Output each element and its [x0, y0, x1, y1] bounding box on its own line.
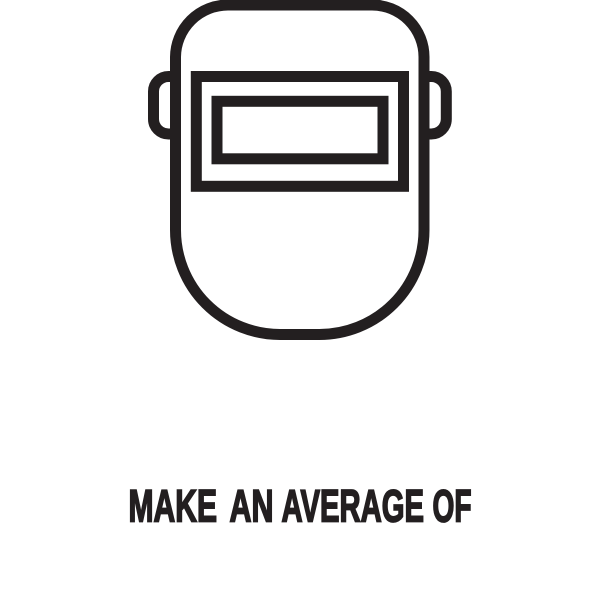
heading text: AN — [230, 480, 274, 531]
icon: welding helmet — [154, 5, 446, 334]
visor outer frame — [196, 76, 404, 186]
heading text: AVERAGE — [282, 480, 424, 531]
heading text: OF — [432, 480, 472, 531]
helmet shell — [176, 5, 424, 334]
right ear strap — [428, 76, 446, 134]
heading text: MAKE — [128, 480, 217, 531]
left ear strap — [154, 76, 172, 134]
heading text — [128, 480, 472, 531]
visor inner window — [217, 101, 383, 159]
